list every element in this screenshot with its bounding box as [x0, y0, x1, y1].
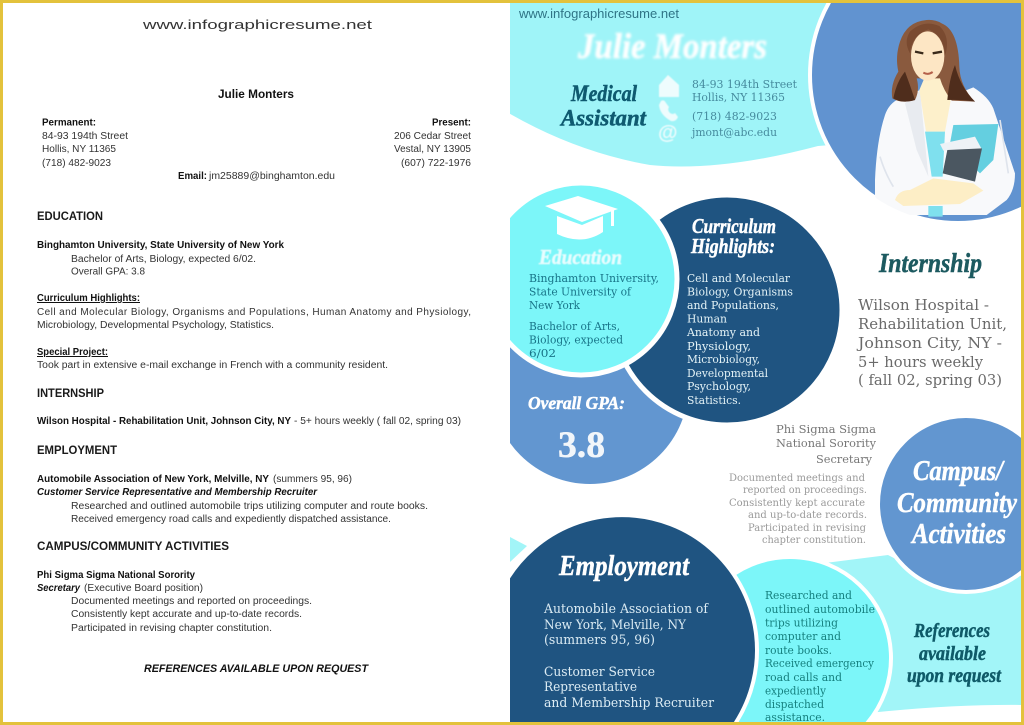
shape: references background — [825, 555, 1024, 714]
section: education — [37, 209, 284, 278]
section: education: EDUCATION — [37, 209, 103, 223]
education details: Biology, expected — [529, 332, 624, 346]
sorority heading: Secretary — [816, 452, 872, 466]
email line: Email: — [178, 171, 207, 182]
education details: 6/02 — [529, 346, 556, 360]
job title: Medical Assistant: Assistant — [559, 106, 647, 130]
internship details: 5+ hours weekly — [858, 353, 984, 371]
present address block: Vestal, NY 13905 — [394, 144, 471, 155]
curriculum list: Biology, Organisms — [687, 284, 793, 298]
present address block — [394, 118, 471, 169]
icon: woman in white coat holding books — [875, 20, 1015, 217]
label: Overall GPA: Overall GPA: — [528, 393, 625, 413]
title: Julie Monters: Julie Monters — [577, 26, 767, 66]
curriculum list: Statistics. — [687, 393, 741, 407]
present address block: 206 Cedar Street — [394, 131, 471, 142]
curriculum list: and Populations, — [687, 298, 779, 312]
curriculum list: Psychology, — [687, 379, 751, 393]
employment details: Customer Service — [544, 665, 655, 680]
permanent address block: Hollis, NY 11365 — [42, 144, 116, 155]
section: campus and community activities: Participated in revising chapter constitution. — [71, 623, 272, 634]
contact details: jmont@abc.edu — [690, 125, 777, 139]
curriculum list: Cell and Molecular — [687, 271, 790, 285]
heading: Curriculum Highlights — [690, 214, 776, 258]
references note on infographic: upon request — [907, 665, 1002, 687]
employment duties: Received emergency — [765, 656, 874, 670]
sorority duties: chapter constitution. — [762, 534, 866, 546]
section: employment: Automobile Association of New York, Melville, NY — [37, 474, 269, 485]
curriculum list: Human — [687, 312, 728, 326]
contact details: (718) 482-9023 — [692, 109, 777, 123]
curriculum list — [686, 271, 793, 407]
employment details: and Membership Recruiter — [544, 696, 715, 711]
section: campus and community activities: Consistently kept accurate and up-to-date records. — [71, 609, 302, 620]
education details: Binghamton University, — [529, 271, 659, 285]
shape: header background — [510, 3, 826, 166]
education details — [529, 271, 659, 360]
employment details — [543, 602, 715, 711]
employment duties: route books. — [765, 643, 832, 657]
employment duties — [765, 588, 875, 724]
employment duties: outlined automobile — [765, 602, 875, 616]
employment duties: trips utilizing — [765, 616, 839, 630]
job title: Medical Assistant: Medical — [570, 81, 638, 106]
shape: campus circle — [878, 416, 1024, 592]
section: special project: Took part in extensive e-mail exchange in French with a community resident. — [37, 360, 388, 371]
section: education: Overall GPA: 3.8 — [71, 266, 145, 278]
section: employment: (summers 95, 96) — [273, 474, 352, 485]
permanent address block: (718) 482-9023 — [42, 158, 111, 169]
contact details — [690, 77, 797, 139]
curriculum list: Developmental — [687, 366, 768, 380]
panel: plain text resume — [37, 17, 471, 675]
sorority duties: Documented meetings and — [729, 472, 865, 484]
heading: Campus/Community Activities: Campus/ — [913, 456, 1005, 487]
education details: State University of — [529, 284, 632, 298]
resume name: Julie Monters — [218, 87, 294, 101]
sorority heading: National Sorority — [776, 436, 876, 450]
shape: overall GPA circle — [510, 347, 683, 484]
shape: portrait circle — [810, 0, 1024, 223]
permanent address block — [42, 118, 128, 169]
section: campus and community activities: Secretary — [37, 583, 80, 594]
section: employment: EMPLOYMENT — [37, 443, 118, 457]
icon: at sign: @ — [658, 122, 678, 144]
section: internship — [37, 386, 461, 427]
section: employment — [37, 443, 428, 525]
internship details — [856, 296, 1007, 389]
employment duties: assistance. — [765, 710, 825, 724]
sorority duties: reported on proceedings. — [743, 484, 867, 496]
heading: Curriculum Highlights: Curriculum — [692, 214, 776, 238]
icon: phone — [659, 100, 678, 121]
sorority duties: Participated in revising — [748, 522, 866, 534]
heading: Internship: Internship — [878, 248, 982, 278]
employment duties: Researched and — [765, 588, 853, 602]
heading: Campus/Community Activities: Activities — [910, 519, 1006, 550]
curriculum list: Physiology, — [687, 339, 751, 353]
contact details: 84-93 194th Street — [692, 77, 797, 91]
section: special project — [37, 347, 388, 371]
section: employment: Customer Service Representative and Membership Recruiter — [37, 487, 318, 498]
sorority duties: and up-to-date records. — [748, 509, 867, 521]
curriculum list: Anatomy and — [686, 325, 761, 339]
references note: REFERENCES AVAILABLE UPON REQUEST — [144, 663, 369, 675]
employment details: Automobile Association of — [543, 602, 709, 617]
section: curriculum highlights — [37, 293, 471, 331]
section: curriculum highlights: Microbiology, Developmental Psychology, Statistics. — [37, 320, 274, 331]
section: internship: - 5+ hours weekly ( fall 02, spring 03) — [294, 416, 461, 427]
heading: Employment: Employment — [558, 550, 690, 582]
section: employment: Received emergency road calls and expediently dispatched assistance. — [71, 514, 391, 525]
permanent address block: 84-93 194th Street — [42, 131, 128, 142]
section: special project: Special Project: — [37, 347, 108, 358]
employment duties: computer and — [765, 629, 842, 643]
section: curriculum highlights: Curriculum Highlights: — [37, 293, 140, 304]
icon: house — [659, 75, 679, 97]
employment duties: dispatched — [765, 697, 825, 711]
references note on infographic: available — [919, 643, 986, 665]
website address on infographic: www.infographicresume.net — [518, 6, 679, 21]
section: campus and community activities: Documented meetings and reported on proceedings. — [71, 596, 312, 607]
section: education: Binghamton University, State University of New York — [37, 240, 284, 251]
references note on infographic: References — [913, 620, 990, 642]
shape: small cyan triangle — [510, 537, 527, 562]
present address block: Present: — [432, 118, 471, 128]
shape: curriculum circle — [612, 195, 842, 425]
section: campus and community activities — [37, 539, 312, 634]
employment details: (summers 95, 96) — [544, 633, 655, 648]
shape: education circle — [510, 186, 680, 378]
education details: New York — [529, 298, 581, 312]
sorority duties: Consistently kept accurate — [729, 497, 865, 509]
value: 3.8: 3.8 — [558, 425, 605, 466]
section: education: Bachelor of Arts, Biology, expected 6/02. — [71, 254, 256, 265]
internship details: ( fall 02, spring 03) — [858, 371, 1002, 389]
employment details: New York, Melville, NY — [544, 618, 686, 633]
email line: jm25889@binghamton.edu — [208, 171, 335, 182]
icons: house, phone, at sign — [658, 75, 679, 144]
internship details: Wilson Hospital - — [858, 296, 989, 314]
section: campus and community activities: Phi Sigma Sigma National Sorority — [37, 570, 195, 581]
employment duties: road calls and — [765, 670, 843, 684]
internship details: Rehabilitation Unit, — [858, 315, 1007, 333]
contact details: Hollis, NY 11365 — [692, 90, 785, 104]
icon: graduation cap — [545, 196, 618, 240]
heading: Education: Education — [538, 245, 622, 269]
sorority duties — [729, 472, 867, 546]
shape: employment duties circle — [736, 559, 893, 722]
section: internship: INTERNSHIP — [37, 386, 104, 400]
sorority heading: Phi Sigma Sigma — [776, 422, 876, 436]
employment duties: expediently — [765, 684, 826, 698]
permanent address block: Permanent: — [42, 118, 96, 128]
sorority heading — [776, 422, 876, 466]
shape: employment circle — [487, 515, 757, 724]
website address: www.infographicresume.net — [142, 17, 373, 32]
heading: Campus/Community Activities — [897, 456, 1017, 550]
section: campus and community activities: (Executive Board position) — [84, 583, 203, 594]
section: internship: Wilson Hospital - Rehabilitation Unit, Johnson City, NY — [37, 416, 291, 427]
employment details: Representative — [544, 680, 637, 695]
job title: Medical Assistant — [559, 81, 647, 130]
present address block: (607) 722-1976 — [401, 158, 471, 169]
references note on infographic — [907, 620, 1002, 687]
section: employment: Researched and outlined automobile trips utilizing computer and route books. — [71, 501, 428, 512]
panel: infographic resume — [485, 0, 1024, 724]
education details: Bachelor of Arts, — [529, 319, 620, 333]
curriculum list: Microbiology, — [687, 352, 760, 366]
heading: Curriculum Highlights: Highlights: — [690, 234, 775, 258]
section: curriculum highlights: Cell and Molecular Biology, Organisms and Populations, Human Anatomy and Physiology, — [37, 307, 471, 318]
section: campus and community activities: CAMPUS/COMMUNITY ACTIVITIES — [37, 539, 229, 553]
internship details: Johnson City, NY - — [856, 334, 1002, 352]
